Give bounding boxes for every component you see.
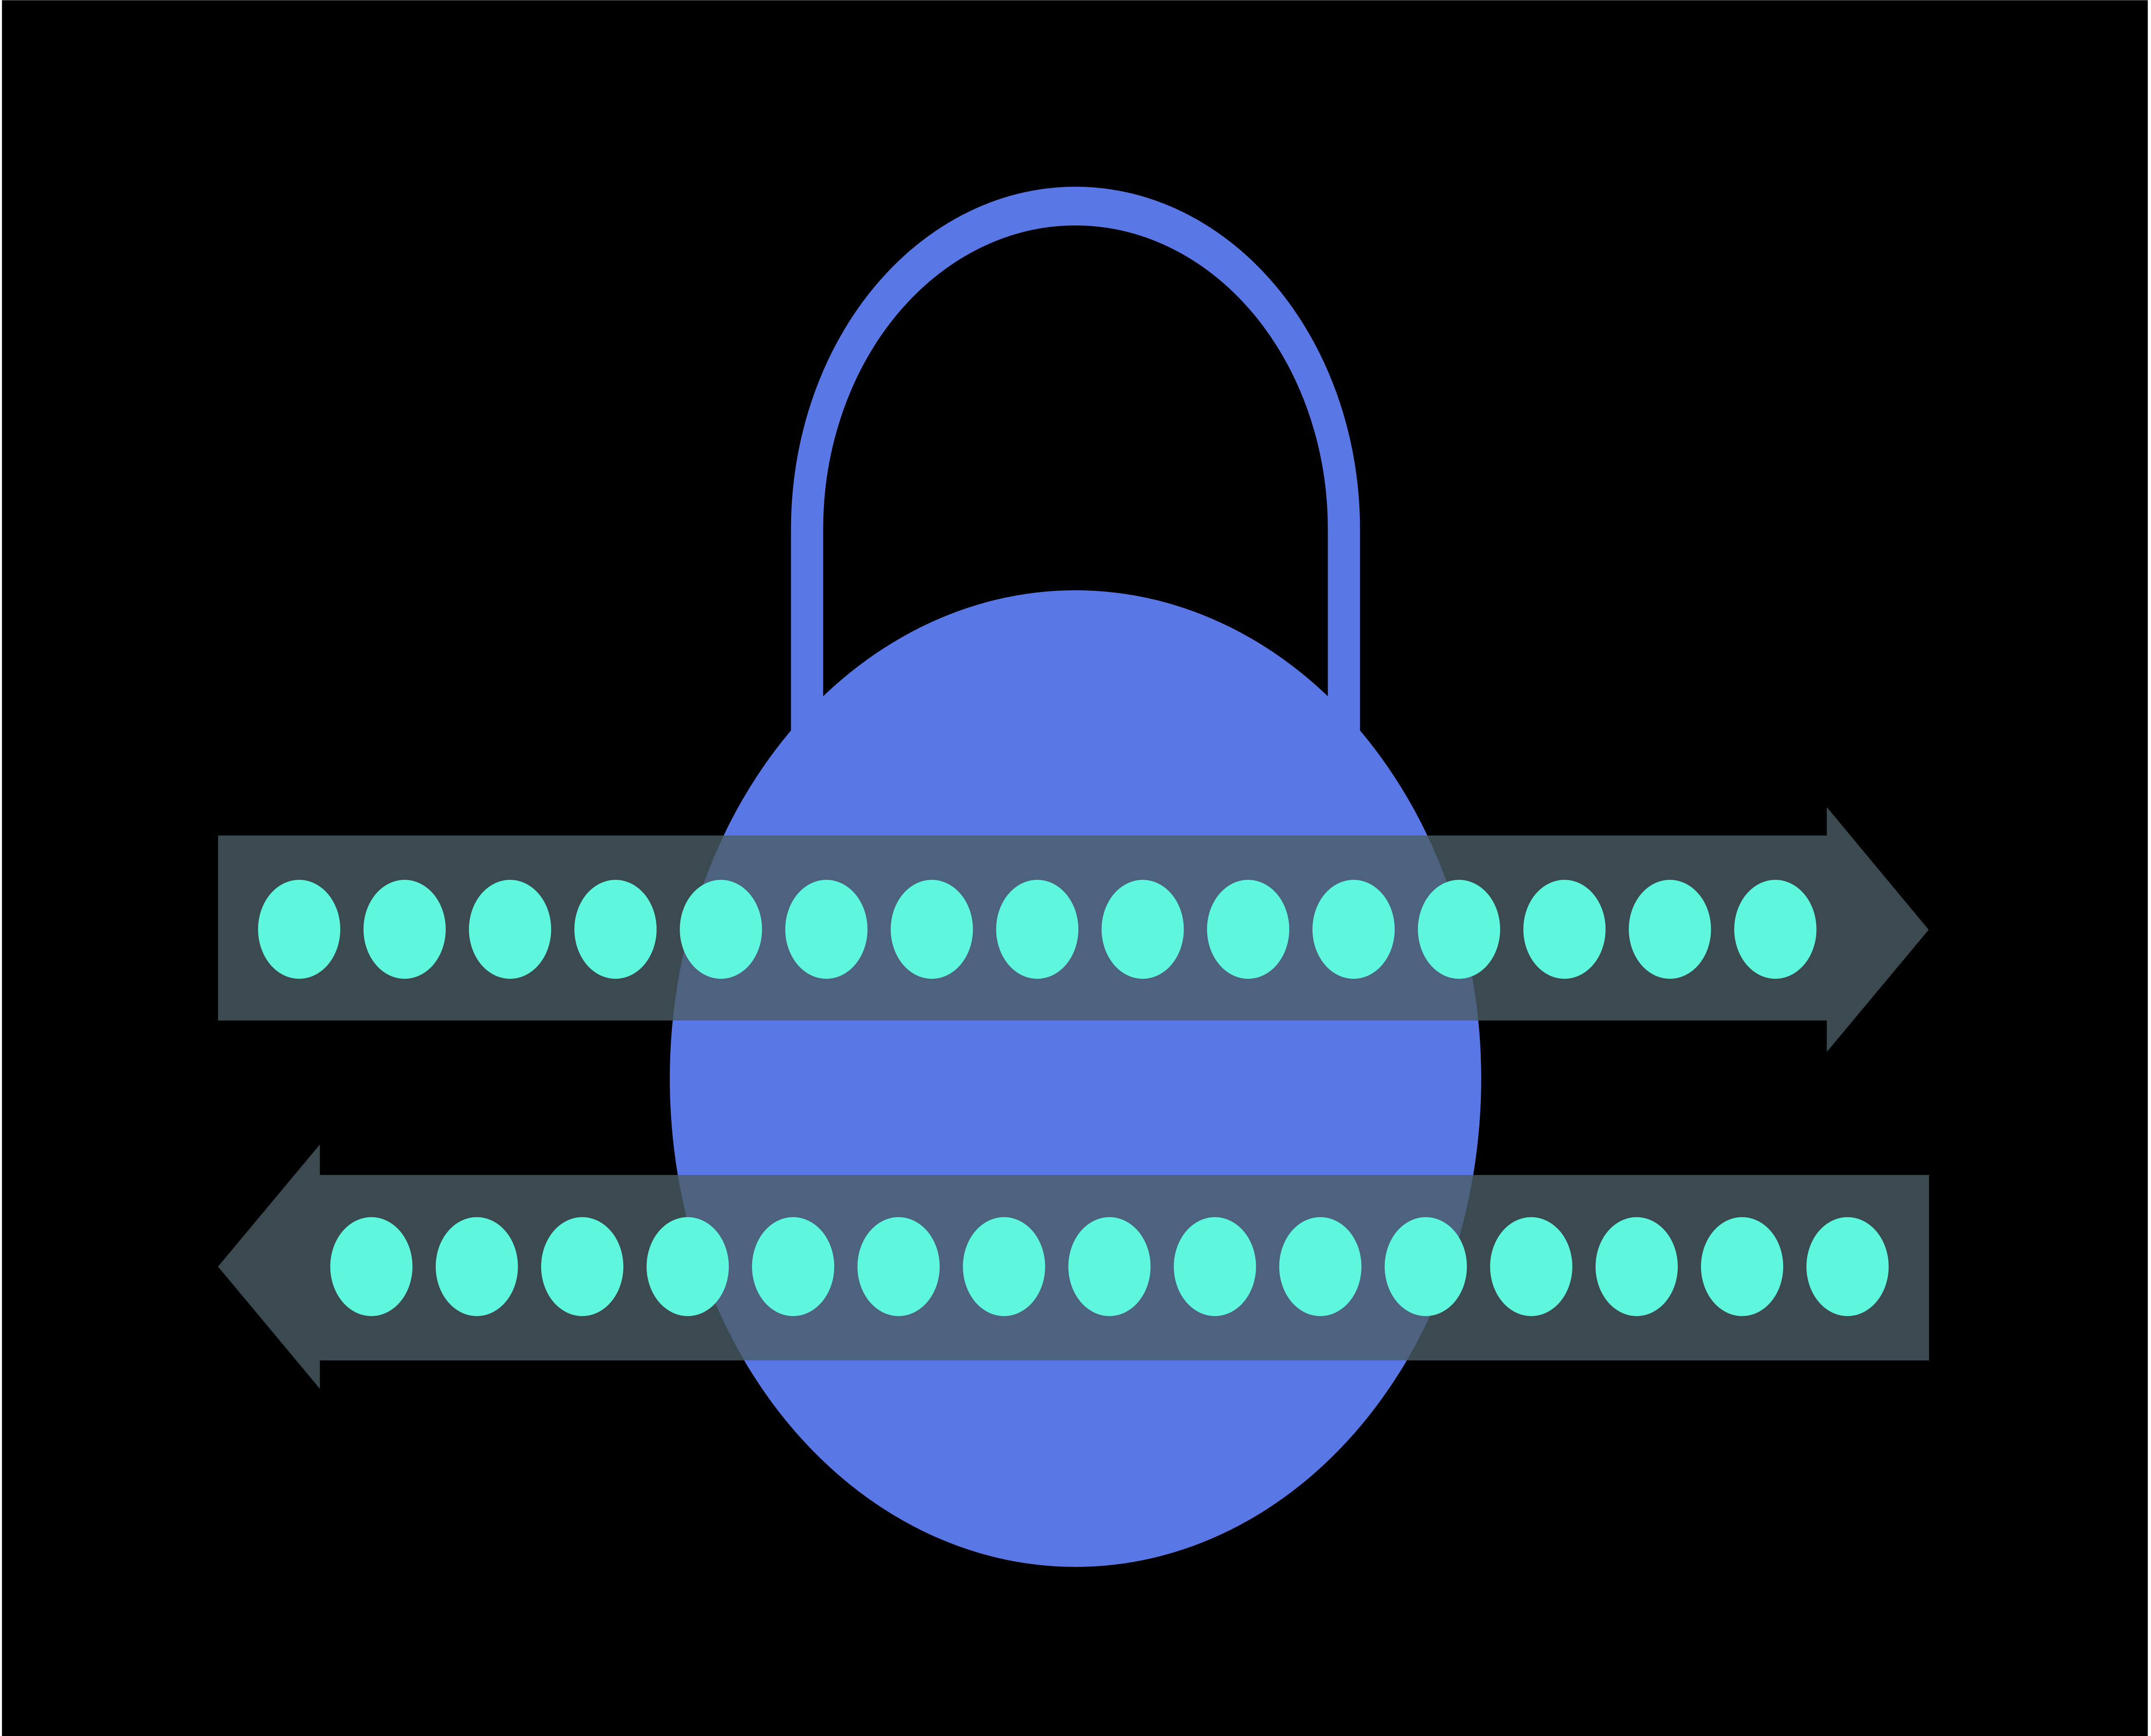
left arrow shape [218, 1144, 1929, 1389]
right arrow data dots [258, 880, 1816, 979]
padlock body [670, 590, 1481, 1567]
icon: padlock [670, 206, 1481, 1567]
right arrow shape [218, 807, 1929, 1052]
arrow: left-pointing data stream [218, 1144, 1929, 1389]
left arrow data dots [330, 1217, 1889, 1316]
arrow: right-pointing data stream [218, 807, 1929, 1052]
padlock shackle [807, 206, 1344, 774]
